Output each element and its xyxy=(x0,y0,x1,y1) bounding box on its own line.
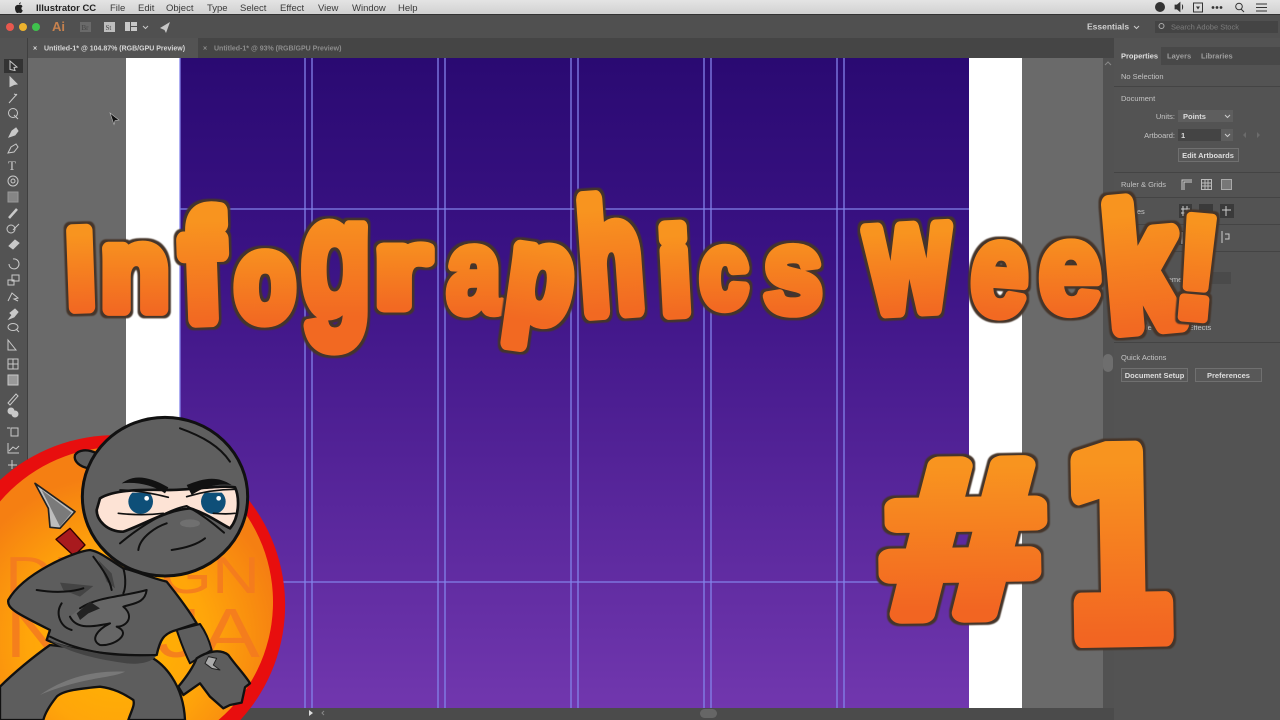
head xyxy=(75,417,248,576)
bridge and stock buttons xyxy=(80,22,115,32)
title: Infographics Week!: g xyxy=(301,165,371,350)
menu items: File xyxy=(110,3,125,14)
preferences section: Preview Bounds xyxy=(1137,291,1191,300)
eyebrows xyxy=(122,478,232,495)
title: Infographics Week!: e xyxy=(966,195,1034,344)
menu items: Window xyxy=(352,3,386,14)
document section: Units: xyxy=(1156,112,1175,121)
tool icons xyxy=(7,61,19,469)
title: Infographics Week!: i xyxy=(656,206,694,339)
bridge and stock buttons: St xyxy=(106,24,111,32)
logo text: DESIGN xyxy=(5,547,260,605)
logo badge: Design Ninja circle xyxy=(0,435,285,720)
preferences section: Scale Corners xyxy=(1133,307,1181,316)
document tabs xyxy=(0,38,1280,58)
tool icons: T xyxy=(8,158,16,173)
document section xyxy=(1121,94,1260,162)
white artboard margin xyxy=(126,58,1022,708)
quick actions xyxy=(1121,353,1262,382)
panel tabs: Layers xyxy=(1167,52,1191,60)
torso shading xyxy=(50,560,157,664)
title: Infographics Week!: I xyxy=(65,207,97,332)
title: Infographics Week!: c xyxy=(701,212,747,329)
ruler and grids xyxy=(1121,180,1232,190)
menu items: Effect xyxy=(280,3,304,14)
arm folds and hand xyxy=(37,557,157,655)
document section: 1 xyxy=(1181,131,1185,140)
canvas background xyxy=(28,58,1103,708)
title: Infographics Week!: a xyxy=(447,205,502,338)
panel tabs xyxy=(1121,52,1233,60)
tools panel xyxy=(0,38,28,720)
workspace and send icons xyxy=(125,22,170,33)
logo text xyxy=(5,547,260,672)
menu items: View xyxy=(318,3,339,14)
document section: Points xyxy=(1183,112,1206,121)
ruler and grids: Ruler & Grids xyxy=(1121,180,1166,189)
menu bar xyxy=(0,0,1280,15)
number heading: #1: 1 xyxy=(1058,402,1179,697)
eye opening xyxy=(97,487,238,532)
application toolbar xyxy=(0,15,1280,38)
document tabs: Untitled-1* @ 104.87% (RGB/GPU Preview) xyxy=(44,46,185,52)
torso xyxy=(8,550,197,655)
document tabs: Untitled-1* @ 93% (RGB/GPU Preview) xyxy=(214,46,341,52)
title: Infographics Week!: h xyxy=(573,169,647,345)
preferences section: Keyboard Increment xyxy=(1121,275,1189,284)
title: Infographics Week!: p xyxy=(499,199,583,352)
document tabs: × xyxy=(33,46,37,52)
snap options: Snap Options xyxy=(1121,233,1167,242)
search stock field xyxy=(1155,21,1278,33)
title: Infographics Week!: s xyxy=(763,205,823,337)
panel tabs: Libraries xyxy=(1201,52,1233,60)
forearm and glove xyxy=(177,624,212,663)
menu items: Object xyxy=(166,3,194,14)
quick actions: Quick Actions xyxy=(1121,353,1167,362)
menu items: Type xyxy=(207,3,228,14)
logo text: NINJA xyxy=(5,594,260,672)
bottom status bar xyxy=(0,708,1114,720)
number heading: #1 xyxy=(884,402,1179,697)
title: Infographics Week!: k xyxy=(1097,169,1185,365)
mask folds xyxy=(120,506,224,550)
guides: Guides xyxy=(1121,207,1145,216)
number heading: #1: # xyxy=(884,416,1042,660)
quick actions: Preferences xyxy=(1207,371,1250,380)
icon: mouse cursor xyxy=(110,113,119,124)
menu items xyxy=(36,3,418,14)
preferences section: Scale Strokes & Effects xyxy=(1133,323,1211,332)
Essentials workspace: Essentials xyxy=(1087,22,1129,32)
ninja mascot xyxy=(0,416,252,720)
document section: Artboard: xyxy=(1144,131,1175,140)
eyes xyxy=(118,489,235,515)
title: Infographics Week! xyxy=(65,165,1229,365)
menu items: Help xyxy=(398,3,418,14)
title: Infographics Week!: ! xyxy=(1165,185,1229,352)
title: Infographics Week!: f xyxy=(179,183,226,351)
snap options xyxy=(1121,231,1229,245)
Ai logo: Ai xyxy=(52,19,65,34)
menu items: Select xyxy=(240,3,267,14)
menu items: Edit xyxy=(138,3,155,14)
title: Infographics Week!: e xyxy=(1039,199,1101,340)
panel tabs: Properties xyxy=(1121,52,1158,60)
title: Infographics Week!: n xyxy=(101,206,169,333)
preferences section xyxy=(1121,272,1231,332)
apple icon xyxy=(15,2,23,13)
menu bar status icons xyxy=(1155,2,1267,12)
legs xyxy=(0,645,185,720)
window controls xyxy=(6,23,40,31)
purple artboard with guides xyxy=(180,58,969,708)
guides xyxy=(1121,204,1234,218)
title: Infographics Week!: W xyxy=(864,201,954,338)
properties panel xyxy=(1114,38,1280,720)
bridge and stock buttons: Br xyxy=(82,24,89,32)
kunai xyxy=(35,483,85,556)
title: Infographics Week!: r xyxy=(375,209,429,330)
search stock field: Search Adobe Stock xyxy=(1171,22,1239,32)
selection state: No Selection xyxy=(1121,72,1164,81)
document tabs: × xyxy=(203,46,207,52)
document section: Document xyxy=(1121,94,1156,103)
title: Infographics Week!: o xyxy=(235,213,295,346)
quick actions: Document Setup xyxy=(1125,371,1185,380)
document section: Edit Artboards xyxy=(1182,151,1234,160)
menu items: Illustrator CC xyxy=(36,3,96,14)
right scrollbar xyxy=(1103,58,1114,708)
